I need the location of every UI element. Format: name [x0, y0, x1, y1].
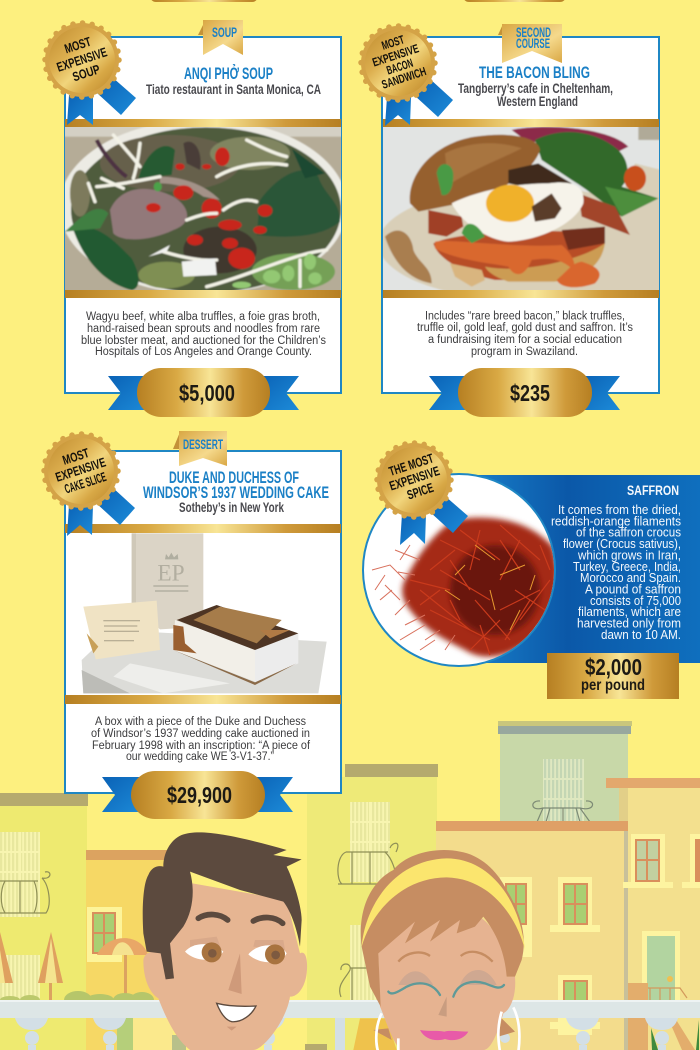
photo: cake box [82, 533, 327, 693]
location: Western England [497, 94, 578, 109]
card frame [65, 37, 341, 393]
card frame [382, 37, 659, 393]
gold bar [383, 119, 659, 127]
description: truffle oil, gold leaf, gold dust and saffron. It’s [417, 322, 633, 334]
panel: saffron [363, 443, 700, 699]
badge: most expensive soup [45, 23, 136, 125]
badge: the most expensive spice: EXPENSIVE [387, 463, 442, 493]
description [81, 311, 326, 358]
badge: the most expensive spice: SPICE [405, 480, 436, 502]
badge: most expensive soup: MOST [63, 34, 93, 56]
saffron description: flower (Crocus sativus), [563, 537, 681, 551]
woman earrings [376, 1007, 519, 1050]
panel: wedding cake [44, 431, 341, 819]
price ribbon: $5,000 [179, 380, 235, 406]
location [458, 81, 613, 109]
price ribbon [108, 368, 299, 417]
saffron circle [363, 474, 555, 666]
price ribbon [102, 771, 293, 819]
photo: pho soup [65, 127, 341, 290]
badge: the most expensive spice: THE MOST [387, 450, 435, 479]
photo: saffron threads [372, 518, 558, 657]
badge: the most expensive spice [377, 443, 468, 545]
monogram: EP [157, 561, 185, 587]
building: orange main [436, 821, 633, 1050]
gold bar [65, 290, 341, 298]
man face [143, 880, 307, 1050]
man hair [143, 832, 302, 979]
price ribbon [429, 368, 620, 417]
building: centre yellow [307, 764, 438, 1050]
street scene buildings [0, 721, 700, 1050]
price ribbon: $29,900 [167, 782, 232, 808]
lower patches under rail [117, 1018, 327, 1050]
balustrade [0, 1000, 700, 1050]
baluster row [15, 1018, 678, 1050]
location: Tangberry’s cafe in Cheltenham, [458, 81, 613, 96]
gold bar [383, 290, 659, 298]
description [417, 310, 633, 358]
saffron description: Morocco and Spain. [580, 571, 681, 585]
saffron price: $2,000 [585, 654, 642, 680]
woman lips [420, 1030, 468, 1040]
saffron description: dawn to 10 AM. [601, 628, 681, 642]
badge: most expensive cake slice: CAKE SLICE [63, 469, 108, 497]
man eyes [185, 937, 287, 964]
woman nose [438, 997, 447, 1017]
category tag: soup [198, 20, 243, 55]
saffron heading: SAFFRON [627, 482, 679, 498]
character: man [143, 832, 307, 1050]
saffron description: filaments, which are [578, 605, 681, 619]
badge: most expensive bacon sandwich: MOST [380, 32, 406, 53]
saffron price: per pound [581, 677, 645, 694]
description: Wagyu beef, white alba truffles, a foie gras broth, [86, 311, 320, 323]
crown [165, 553, 178, 559]
gold bar [65, 524, 341, 533]
dish title: WINDSOR’S 1937 WEDDING CAKE [143, 484, 329, 502]
photo: bacon sandwich [383, 127, 659, 290]
presentation box [132, 533, 203, 629]
box inscription [153, 585, 188, 587]
saffron description: A pound of saffron [585, 582, 681, 596]
badge: most expensive cake slice: EXPENSIVE [53, 454, 108, 485]
woman eye shadow [398, 970, 497, 985]
dish title: ANQI PHỞ SOUP [184, 64, 273, 83]
category tag: second course: COURSE [516, 36, 550, 51]
card frame [65, 451, 341, 793]
woman hair [361, 850, 524, 1007]
description: of Windsor’s 1937 wedding cake auctioned in [91, 728, 310, 740]
building: orange left [86, 850, 170, 1050]
badge: most expensive bacon sandwich: BACON [385, 56, 415, 77]
category tag: second course: SECOND [516, 25, 551, 40]
woman eyebrows [398, 952, 493, 962]
description [91, 716, 311, 763]
saffron price [547, 653, 679, 699]
man mouth [217, 1003, 256, 1022]
top price stubs [150, 0, 566, 2]
badge: most expensive soup: EXPENSIVE [55, 44, 109, 75]
location: Tiato restaurant in Santa Monica, CA [146, 82, 321, 97]
building: right [606, 778, 700, 1050]
category tag: dessert: DESSERT [183, 437, 223, 452]
description: Includes “rare breed bacon,” black truffles, [425, 310, 625, 322]
inscription card [83, 601, 160, 659]
character: woman [353, 850, 525, 1050]
price ribbon: $235 [510, 380, 550, 406]
badge: most expensive cake slice: MOST [61, 445, 91, 468]
woman dress [353, 1018, 397, 1050]
blue panel [459, 475, 700, 663]
cake tin [173, 620, 255, 682]
woman headband [362, 858, 525, 950]
dish title: THE BACON BLING [479, 64, 590, 82]
building: green tower [498, 721, 632, 823]
woman eyelashes [388, 982, 504, 997]
saffron description: of the saffron crocus [576, 526, 681, 540]
woman face [378, 907, 515, 1050]
location: Sotheby’s in New York [179, 500, 284, 515]
dish title [143, 469, 329, 502]
marble tray [82, 630, 327, 693]
description: our wedding cake WE 3-V1-37.” [126, 751, 274, 763]
man nose [228, 953, 242, 994]
badge: most expensive soup: SOUP [71, 61, 102, 84]
building: left yellow [0, 793, 88, 1050]
description: program in Swaziland. [471, 346, 578, 358]
description: a fundraising item for a social education [428, 334, 622, 346]
description: A box with a piece of the Duke and Duchess [95, 716, 306, 728]
badge: most expensive bacon sandwich: EXPENSIVE [371, 41, 421, 69]
umbrellas and hedge [0, 932, 154, 1009]
category tag: dessert [173, 431, 227, 466]
gold bar [65, 695, 341, 704]
category tag: second course [498, 24, 562, 63]
saffron description: consists of 75,000 [590, 594, 681, 608]
man eyebrows [198, 914, 283, 923]
gold bar [65, 119, 341, 127]
description: hand-raised bean sprouts and noodles from rare [87, 323, 320, 335]
category tag: soup: SOUP [212, 25, 237, 40]
badge: most expensive bacon sandwich: SANDWICH [380, 64, 428, 92]
description: Hospitals of Los Angeles and Orange County. [95, 346, 312, 358]
dish title: DUKE AND DUCHESS OF [169, 469, 299, 487]
description: blue lobster meat, and auctioned for the Children’s [81, 335, 326, 347]
panel: bacon sandwich [361, 24, 675, 417]
saffron description: reddish-orange filaments [551, 514, 681, 528]
saffron description: Turkey, Greece, India, [573, 560, 681, 574]
saffron description [551, 503, 681, 642]
saffron description: It comes from the dried, [558, 503, 681, 517]
saffron description: harvested only from [577, 616, 681, 630]
badge: most expensive cake slice [44, 434, 135, 536]
badge: most expensive bacon sandwich [361, 26, 453, 126]
saffron description: which grows in Iran, [577, 548, 681, 562]
panel: soup [45, 20, 360, 417]
description: February 1998 with an inscription: “A piece of [92, 740, 311, 752]
